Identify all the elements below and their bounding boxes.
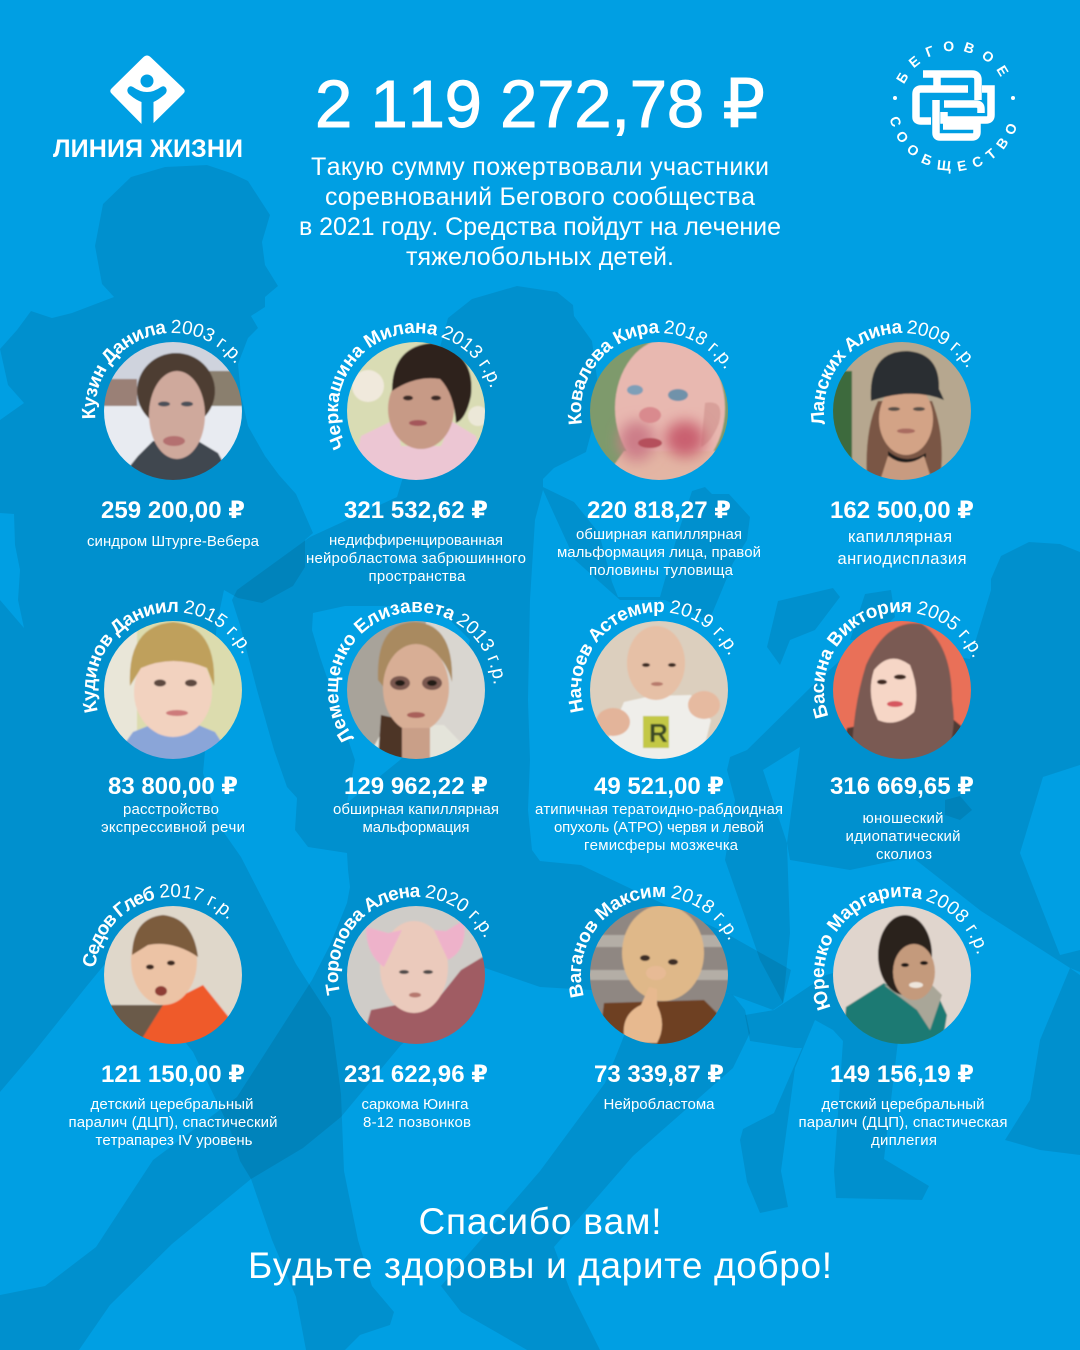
name arc <box>568 320 728 424</box>
diagnosis: синдром Штурге-Вебера <box>87 533 260 550</box>
name arc: Лемещенко Елизавета <box>328 602 454 742</box>
name arc: 2020 г.р. <box>425 885 489 938</box>
amount: 73 339,87 ₽ <box>594 1061 724 1088</box>
card: Начоев Астемир <box>535 600 783 854</box>
diagnosis: пространства <box>368 568 466 585</box>
diagnosis: мальформация лица, правой <box>557 544 761 561</box>
diagnosis <box>798 1096 1008 1149</box>
card: Басина Виктория <box>812 601 978 863</box>
ring text bottom: СООБЩЕСТВО <box>890 116 1016 174</box>
diagnosis: мальформация <box>362 819 470 836</box>
name arc: Ланских Алина <box>810 323 902 424</box>
name arc: Черкашина Милана <box>328 322 437 450</box>
subtitle text: соревнований Бегового сообщества <box>325 183 755 211</box>
name arc: Кузин Данила <box>82 324 167 418</box>
name arc: Ковалева Кира <box>568 323 660 424</box>
diagnosis <box>306 532 526 585</box>
card: Ваганов Максим <box>569 886 734 1113</box>
subtitle text: в 2021 году. Средства пойдут на лечение <box>299 213 781 241</box>
diagnosis <box>68 1096 278 1149</box>
card: Кузин Данила <box>82 320 260 550</box>
diagnosis: недиффиренцированная <box>329 532 503 549</box>
photo <box>103 341 243 481</box>
name arc: Начоев Астемир <box>568 602 664 713</box>
photo <box>103 620 243 760</box>
diagnosis: капиллярная <box>848 528 952 546</box>
card: Кудинов Даниил <box>82 600 247 836</box>
amount: 83 800,00 ₽ <box>108 773 238 800</box>
diagnosis: Нейробластома <box>604 1096 715 1113</box>
photo <box>346 905 486 1045</box>
card: Седов Глеб <box>68 884 278 1149</box>
diagnosis <box>846 810 960 863</box>
name arc <box>814 886 984 1011</box>
diagnosis: юношеский <box>862 810 944 827</box>
name arc: 2013 г.р. <box>441 326 497 388</box>
amount: 231 622,96 ₽ <box>344 1061 488 1088</box>
name arc: Торопова Алена <box>325 886 420 996</box>
name arc: 2005 г.р. <box>916 601 978 658</box>
amount: 129 962,22 ₽ <box>344 773 488 800</box>
name arc: 2009 г.р. <box>907 320 971 368</box>
subtitle text: тяжелобольных детей. <box>406 243 674 271</box>
name arc: Басина Виктория <box>812 602 911 719</box>
name arc <box>83 884 229 966</box>
diagnosis: диплегия <box>871 1132 937 1149</box>
photo <box>832 905 972 1045</box>
diagnosis: тетрапарез IV уровень <box>96 1132 253 1149</box>
name arc: Кудинов Даниил <box>82 602 178 713</box>
diagnosis: экспрессивной речи <box>101 819 245 836</box>
diagnosis: нейробластома забрюшинного <box>306 550 526 567</box>
card: Ковалева Кира <box>557 320 761 579</box>
diagnosis: ангиодисплазия <box>838 550 966 568</box>
name arc <box>569 886 734 998</box>
name arc <box>82 600 247 713</box>
diagnosis <box>557 526 761 579</box>
photo <box>832 620 972 760</box>
amount: 162 500,00 ₽ <box>830 497 974 524</box>
card: Ланских Алина <box>810 320 974 568</box>
diagnosis <box>838 528 966 568</box>
diagnosis: обширная капиллярная <box>333 801 499 818</box>
name arc: 2008 г.р. <box>926 890 984 954</box>
name arc <box>328 602 503 742</box>
name arc: Седов Глеб <box>83 886 154 966</box>
subtitle text: Такую сумму пожертвовали участники <box>311 153 769 181</box>
card: Юренко Маргарита <box>798 886 1008 1149</box>
photo <box>346 620 486 762</box>
card: Лемещенко Елизавета <box>328 602 503 836</box>
icon: diamond with figure <box>110 56 185 130</box>
diagnosis: детский церебральный <box>90 1096 254 1113</box>
name arc: 2018 г.р. <box>664 320 728 369</box>
diagnosis: паралич (ДЦП), спастическая <box>798 1114 1008 1131</box>
amount: 220 818,27 ₽ <box>587 497 731 524</box>
photo: R <box>649 718 668 748</box>
diagnosis: половины туловища <box>589 562 734 579</box>
name arc: 2018 г.р. <box>671 886 734 940</box>
amount: 259 200,00 ₽ <box>101 497 245 524</box>
ring dots <box>893 96 1015 100</box>
diagnosis: 8-12 позвонков <box>363 1114 471 1131</box>
diagnosis: сколиоз <box>876 846 932 863</box>
logo: Линия жизни <box>53 56 243 163</box>
diagnosis <box>333 801 499 836</box>
diagnosis <box>535 801 783 854</box>
name arc <box>810 320 971 424</box>
monogram <box>916 74 991 137</box>
title: total amount: 2 119 272,78 ₽ <box>315 67 765 142</box>
amount: 321 532,62 ₽ <box>344 497 488 524</box>
logo wordmark: ЛИНИЯ ЖИЗНИ <box>53 135 243 163</box>
diagnosis: обширная капиллярная <box>576 526 742 543</box>
diagnosis: саркома Юинга <box>362 1096 469 1113</box>
name arc: 2015 г.р. <box>184 600 247 654</box>
footer thanks: Будьте здоровы и дарите добро! <box>248 1245 832 1286</box>
name arc: 2013 г.р. <box>456 614 503 684</box>
name arc: 2003 г.р. <box>172 320 238 364</box>
name arc <box>325 885 489 996</box>
photo <box>589 338 729 486</box>
diagnosis: паралич (ДЦП), спастический <box>68 1114 278 1131</box>
name arc: 2019 г.р. <box>670 600 734 655</box>
card: Черкашина Милана <box>306 322 526 585</box>
diagnosis: атипичная тератоидно-рабдоидная <box>535 801 783 818</box>
name arc <box>82 320 238 418</box>
diagnosis: опухоль (АТРО) червя и левой <box>554 819 764 836</box>
name arc: 2017 г.р. <box>160 884 229 919</box>
subtitle text <box>299 153 781 271</box>
name arc <box>328 322 497 450</box>
diagnosis: идиопатический <box>846 828 960 845</box>
photo <box>346 341 488 481</box>
diagnosis: гемисферы мозжечка <box>584 837 739 854</box>
diagnosis <box>362 1096 471 1131</box>
logo: Беговое сообщество <box>890 41 1016 174</box>
card: Торопова Алена <box>325 885 489 1131</box>
footer thanks: Спасибо вам! <box>418 1201 662 1242</box>
amount: 149 156,19 ₽ <box>830 1061 974 1088</box>
name arc <box>812 601 978 719</box>
amount: 49 521,00 ₽ <box>594 773 724 800</box>
diagnosis <box>101 801 245 836</box>
footer thanks <box>248 1201 832 1286</box>
photo <box>589 905 729 1045</box>
amount: 121 150,00 ₽ <box>101 1061 245 1088</box>
photo <box>589 620 729 760</box>
diagnosis: детский церебральный <box>822 1096 984 1113</box>
amount: 316 669,65 ₽ <box>830 773 974 800</box>
photo <box>103 905 243 1045</box>
diagnosis: расстройство <box>123 801 219 818</box>
photo <box>832 341 972 481</box>
ring text top: БЕГОВОЕ <box>896 41 1009 84</box>
name arc <box>568 600 734 713</box>
name arc: Юренко Маргарита <box>814 886 922 1011</box>
name arc: Ваганов Максим <box>569 887 665 998</box>
